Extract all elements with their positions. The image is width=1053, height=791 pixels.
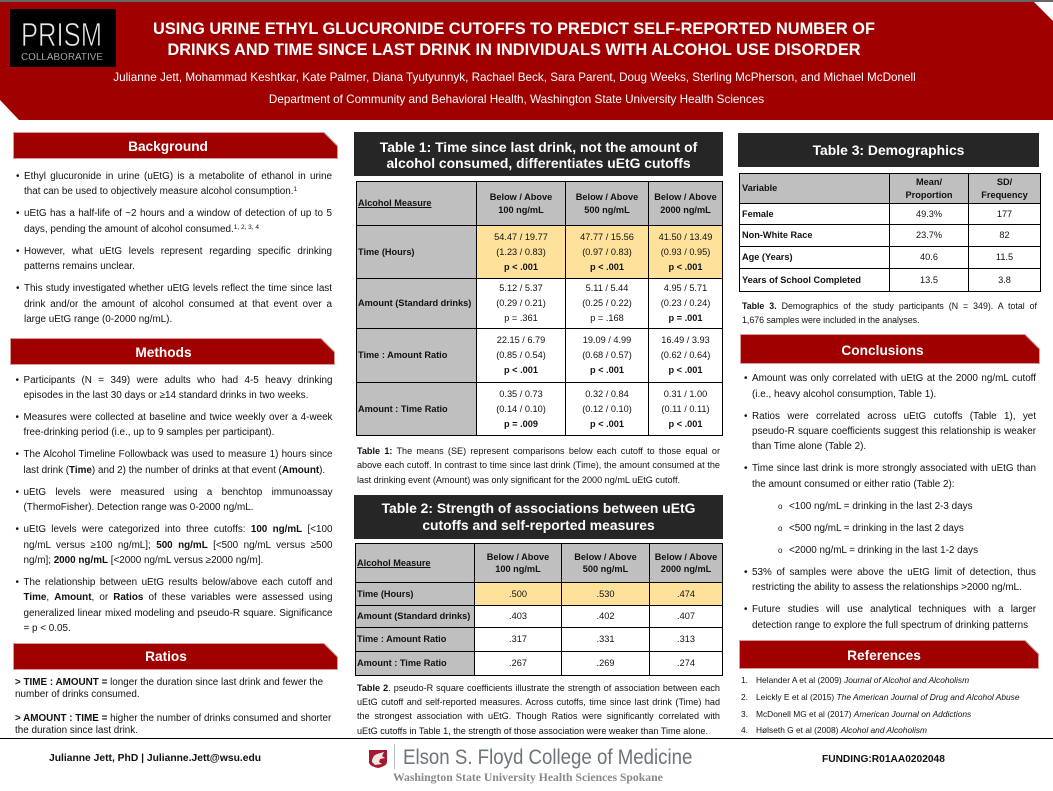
college name: Elson S. Floyd College of Medicine: [403, 745, 692, 769]
table 1 data: (0.25 / 0.22): [582, 298, 632, 308]
table 1 data: (0.68 / 0.57): [582, 350, 632, 360]
table 1 data: 2000 ng/mL: [660, 204, 711, 214]
heading: references: References: [847, 648, 921, 663]
table 1 data: Amount (Standard drinks): [358, 298, 471, 308]
caption: table 3: Table 3. Demographics of the study participants (N = 349). A total of: [742, 301, 1037, 311]
text block: background bullets: uEtG has a half-life of ~2 hours and a window of detection of up to 5: [24, 208, 332, 219]
contact: Julianne Jett, PhD | Julianne.Jett@wsu.edu: [49, 753, 261, 764]
caption: table 2: uEtG cutoffs in Table 1, the strength of those association were weaker than Time alone.: [357, 726, 708, 736]
table 2 data: .274: [677, 658, 695, 668]
table 2 data: .500: [509, 588, 527, 598]
panel: methods: •: [16, 412, 19, 423]
text block: background bullets: patterns remains unclear.: [24, 261, 135, 272]
table 2 data: Below / Above: [574, 552, 637, 562]
table 2 data: .474: [677, 588, 695, 598]
table 2 data: .407: [677, 611, 695, 621]
header banner: [0, 0, 1053, 120]
table 1 data: p = .009: [504, 418, 538, 428]
text block: reference list: [741, 675, 1020, 735]
title: DRINKS AND TIME SINCE LAST DRINK IN INDIVIDUALS WITH ALCOHOL USE DISORDER: [167, 40, 861, 58]
table 1 data: Alcohol Measure: [358, 198, 432, 208]
text block: conclusions bullets: Future studies will use analytical techniques with a larger: [752, 604, 1036, 615]
table 2 data: Below / Above: [655, 552, 717, 562]
text block: conclusions bullets: Time since last drink is more strongly associated with uEtG than: [752, 463, 1036, 474]
table 1 data: 0.31 / 1.00: [664, 388, 707, 398]
table 3 data: 11.5: [996, 252, 1013, 262]
table 2 data: .267: [509, 658, 527, 668]
table 1 data: (0.62 / 0.64): [661, 350, 710, 360]
text block: background bullets: drink and/or the amount of alcohol consumed at that event over a: [24, 299, 332, 310]
caption: table 2: the strongest association with uEtG. Though Ratios were significantly correlated with: [357, 711, 720, 721]
text block: ratio definitions: > AMOUNT : TIME = higher the number of drinks consumed and shorter: [15, 713, 331, 724]
heading: background: [13, 132, 338, 159]
table 3 data: 49.3%: [916, 208, 942, 218]
table 1 data: 5.11 / 5.44: [586, 283, 628, 293]
panel: background: •: [16, 283, 19, 294]
heading: ratios: Ratios: [145, 649, 187, 664]
text block: methods bullets: free-drinking period (i.e., up to 9 samples per participant).: [24, 427, 274, 438]
table 1 data: p < .001: [504, 365, 538, 375]
caption: table 2: Table 2. pseudo-R square coefficients illustrate the strength of association between each: [357, 683, 720, 693]
table 2 data: 2000 ng/mL: [661, 564, 711, 574]
title: [153, 20, 875, 58]
heading: table 3: [738, 133, 1039, 167]
text block: methods bullets: uEtG levels were categorized into three cutoffs: 100 ng/mL [<100: [24, 524, 332, 535]
caption: table 3: 1,676 samples were included in the analyses.: [742, 315, 920, 325]
table 2 data: [355, 543, 723, 676]
text block: conclusions bullets: o: [778, 524, 782, 533]
text block: reference list: 3.: [741, 709, 748, 719]
table 3 data: Variable: [742, 183, 777, 193]
campus name: Washington State University Health Sciences Spokane: [393, 771, 663, 784]
table 2 data: Time : Amount Ratio: [357, 634, 446, 644]
table 3 data: Female: [742, 208, 774, 218]
text block: background bullets: days, pending the amount of alcohol consumed.1, 2, 3, 4: [24, 224, 259, 235]
table 1 data: (0.97 / 0.83): [582, 246, 632, 256]
text block: reference list: Leickly E et al (2015) The American Journal of Drug and Alcohol Abuse: [756, 692, 1020, 702]
heading: background: Background: [128, 139, 208, 154]
table 2 data: Amount (Standard drinks): [357, 611, 470, 621]
heading: conclusions: Conclusions: [841, 343, 924, 358]
text block: methods bullets: The Alcohol Timeline Followback was used to measure 1) hours since: [24, 449, 332, 460]
table 2 data: .403: [509, 611, 527, 621]
text block: ratio definitions: [15, 677, 332, 736]
text block: conclusions bullets: detection range to explore the full spectrum of drinking patterns: [752, 620, 1028, 631]
panel: methods: •: [16, 449, 19, 460]
funding: FUNDING:R01AA0202048: [822, 754, 945, 765]
text block: conclusions bullets: o: [778, 546, 782, 555]
text block: conclusions bullets: [744, 373, 1036, 631]
panel: methods: •: [16, 375, 19, 386]
text block: methods bullets: Time, Amount, or Ratios of these variables were assessed using: [24, 592, 332, 603]
text block: ratio definitions: number of drinks consumed.: [15, 689, 140, 700]
table 1 data: (0.29 / 0.21): [496, 298, 546, 308]
table 1 data: Time : Amount Ratio: [358, 350, 447, 360]
table 1 data: 0.35 / 0.73: [499, 388, 543, 398]
table 3 data: Mean/: [916, 177, 942, 187]
table 1 data: (0.11 / 0.11): [661, 404, 710, 414]
panel: conclusions: •: [744, 604, 747, 615]
table 1 data: 16.49 / 3.93: [661, 335, 710, 345]
table 1 data: Amount : Time Ratio: [358, 404, 448, 414]
table 3 data: Years of School Completed: [742, 274, 861, 284]
text block: reference list: 4.: [741, 725, 748, 735]
table 2 data: .317: [509, 634, 527, 644]
text block: methods bullets: episodes in the last 30 days or ≥14 standard drinks in two weeks.: [24, 390, 308, 401]
table 2 data: Alcohol Measure: [357, 558, 431, 568]
heading: table 2: cutoffs and self-reported measures: [422, 517, 655, 533]
heading: table 1: [354, 132, 723, 176]
table 1 data: (0.12 / 0.10): [582, 404, 632, 414]
text block: methods bullets: = p < 0.05.: [24, 623, 71, 634]
icon: WSU crest: [369, 750, 387, 768]
text block: conclusions bullets: o: [778, 502, 782, 511]
text block: methods bullets: last drink (Time) and 2) the number of drinks at that event (Amount).: [24, 465, 325, 476]
table 2 data: 100 ng/mL: [495, 564, 541, 574]
text block: background bullets: However, what uEtG levels represent regarding specific drinking: [24, 246, 332, 257]
text block: conclusions bullets: (i.e., heavy alcohol consumption, Table 1).: [752, 389, 936, 400]
panel: background: •: [16, 208, 19, 219]
table 3 data: [739, 173, 1041, 292]
authors: Julianne Jett, Mohammad Keshtkar, Kate Palmer, Diana Tyutyunnyk, Rachael Beck, Sara Parent, Doug Weeks, Sterling McPherson, and Michael McDonell: [113, 71, 916, 84]
table 1 data: 0.32 / 0.84: [585, 388, 629, 398]
panel: conclusions: [740, 334, 1040, 631]
table 3 data: 13.5: [920, 274, 938, 284]
heading: methods: [10, 338, 335, 365]
text block: reference list: 1.: [741, 675, 748, 685]
caption: table 2: [357, 683, 720, 736]
table 1 data: (1.23 / 0.83): [496, 246, 546, 256]
table 1 data: 100 ng/mL: [498, 204, 544, 214]
table 1 data: p < .001: [669, 365, 702, 375]
table 3 data: Age (Years): [742, 252, 793, 262]
text block: methods bullets: Measures were collected at baseline and twice weekly over a 4-week: [24, 412, 332, 423]
table 1 data: (0.14 / 0.10): [496, 404, 546, 414]
panel: conclusions: •: [744, 411, 747, 422]
heading: table 3: Table 3: Demographics: [813, 142, 964, 158]
panel: methods: •: [16, 487, 19, 498]
table 1 data: 22.15 / 6.79: [497, 335, 545, 345]
panel: conclusions: •: [744, 567, 747, 578]
caption: table 1: above each cutoff. In contrast to time since last drink (Time), the amount consumed at the: [357, 460, 720, 470]
table 1 data: p = .168: [590, 313, 624, 323]
text block: reference list: Helander A et al (2009) Journal of Alcohol and Alcoholism: [756, 675, 969, 685]
table 3 data: Proportion: [906, 190, 952, 200]
text block: methods bullets: (ThermoFisher). Detection range was 0-2000 ng/mL.: [24, 502, 253, 513]
table 1 data: [356, 181, 723, 436]
table 3 data: Non-White Race: [742, 230, 812, 240]
table 2 data: .402: [597, 611, 614, 621]
text block: methods bullets: uEtG levels were measured using a benchtop immunoassay: [24, 487, 332, 498]
caption: table 1: last drinking event (Amount) was only significant for the 2000 ng/mL uEtG cutoff.: [357, 475, 680, 485]
table 1 data: Time (Hours): [358, 246, 414, 256]
table 1 data: (0.23 / 0.24): [661, 298, 710, 308]
panel: background: •: [16, 246, 19, 257]
text block: background bullets: large uEtG range (0-2000 ng/mL).: [24, 314, 172, 325]
text block: conclusions bullets: Ratios were correlated across uEtG cutoffs (Table 1), yet: [752, 411, 1036, 422]
table 1 data: p = .001: [669, 313, 702, 323]
text block: conclusions bullets: <100 ng/mL = drinking in the last 2-3 days: [789, 501, 973, 512]
table 1 data: 47.77 / 15.56: [580, 232, 634, 242]
text block: methods bullets: Participants (N = 349) were adults who had 4-5 heavy drinking: [24, 375, 332, 386]
heading: ratios: [13, 643, 338, 670]
text block: conclusions bullets: Amount was only correlated with uEtG at the 2000 ng/mL cutoff: [752, 373, 1036, 384]
heading: conclusions: [740, 334, 1040, 364]
table 3 data: 23.7%: [916, 230, 942, 240]
logo: PRISM Collaborative: COLLABORATIVE: [21, 52, 103, 63]
text block: ratio definitions: > TIME : AMOUNT = longer the duration since last drink and fewer the: [15, 677, 323, 688]
table 2 data: .313: [677, 634, 695, 644]
table 1 data: p < .001: [590, 365, 624, 375]
text block: conclusions bullets: than Time alone (Table 2).: [752, 441, 866, 452]
affiliation: Department of Community and Behavioral Health, Washington State University Health Sciences: [269, 93, 764, 106]
text block: methods bullets: ng/mL versus ≥100 ng/mL]; 500 ng/mL [<500 ng/mL versus ≥500: [24, 540, 332, 551]
text block: background bullets: [16, 171, 332, 325]
table 1 data: p = .361: [504, 313, 538, 323]
text block: background bullets: This study investigated whether uEtG levels reflect the time since last: [24, 283, 332, 294]
caption: table 3: [742, 301, 1037, 325]
text block: reference list: Hølseth G et al (2008) Alcohol and Alcoholism: [756, 725, 927, 735]
text block: conclusions bullets: pseudo-R square coefficients suggest this relationship is weaker: [752, 426, 1036, 437]
panel: table 3: [738, 133, 1041, 325]
caption: table 1: Table 1: The means (SE) represent comparisons below each cutoff to those equal or: [357, 446, 720, 456]
table 1 data: Below / Above: [654, 192, 717, 202]
table 3 data: 3.8: [998, 274, 1011, 284]
panel: table 2: [354, 495, 723, 736]
text block: methods bullets: generalized linear mixed modeling and pseudo-R square. Significance: [24, 608, 332, 619]
caption: table 2: uEtG cutoff and self-reported measures. Across cutoffs, time since last drink (Time) had: [357, 697, 720, 707]
table 2 data: .530: [597, 588, 614, 598]
caption: table 1: [357, 446, 720, 485]
table 1 data: 19.09 / 4.99: [583, 335, 631, 345]
table 1 data: 5.12 / 5.37: [499, 283, 543, 293]
text block: background bullets: that can be used to objectively measure alcohol consumption.1: [24, 186, 297, 197]
table 1 data: 500 ng/mL: [584, 204, 630, 214]
panel: references: [739, 640, 1039, 735]
heading: table 2: [354, 495, 723, 539]
table 1 data: 54.47 / 19.77: [494, 232, 548, 242]
panel: methods: •: [16, 524, 19, 535]
panel: conclusions: •: [744, 373, 747, 384]
text block: methods bullets: [16, 375, 332, 634]
panel: background: •: [16, 171, 19, 182]
table 1 data: (0.85 / 0.54): [496, 350, 546, 360]
table 3 data: SD/: [997, 177, 1012, 187]
panel: conclusions: •: [744, 463, 747, 474]
text block: ratio definitions: the duration since last drink.: [15, 725, 138, 736]
divider: [394, 744, 395, 769]
table 1 data: 41.50 / 13.49: [659, 232, 712, 242]
table 1 data: p < .001: [669, 262, 702, 272]
table 1 data: Below / Above: [576, 192, 638, 202]
table 3 data: 177: [997, 208, 1012, 218]
panel: table 1: [354, 132, 723, 485]
text block: conclusions bullets: restricting the ability to assess the relationships >2000 ng/mL.: [752, 582, 1022, 593]
table 1 data: 4.95 / 5.71: [664, 283, 707, 293]
text block: reference list: McDonell MG et al (2017) American Journal on Addictions: [756, 709, 971, 719]
table 2 data: .331: [597, 634, 614, 644]
table 2 data: .269: [597, 658, 614, 668]
table 2 data: Amount : Time Ratio: [357, 658, 447, 668]
text block: conclusions bullets: 53% of samples were above the uEtG limit of detection, thus: [752, 567, 1036, 578]
table 1 data: p < .001: [669, 418, 702, 428]
logo: PRISM Collaborative: [10, 9, 116, 67]
heading: table 2: Table 2: Strength of associations between uEtG: [382, 500, 695, 516]
title: USING URINE ETHYL GLUCURONIDE CUTOFFS TO PREDICT SELF-REPORTED NUMBER OF: [153, 20, 875, 38]
table 1 data: p < .001: [590, 418, 624, 428]
panel: ratios: [13, 643, 338, 736]
panel: background: [13, 132, 338, 325]
panel: methods: •: [16, 577, 19, 588]
heading: references: [739, 640, 1039, 669]
heading: table 1: alcohol consumed, differentiates uEtG cutoffs: [386, 155, 691, 171]
text block: conclusions bullets: the amount consumed or either ratio (Table 2):: [752, 479, 955, 490]
table 1 data: p < .001: [504, 262, 538, 272]
table 2 data: 500 ng/mL: [583, 564, 628, 574]
table 3 data: 40.6: [920, 252, 938, 262]
table 3 data: 82: [999, 230, 1010, 240]
text block: methods bullets: ng/m]; 2000 ng/mL [<2000 ng/mL versus ≥2000 ng/m].: [24, 555, 263, 566]
table 1 data: p < .001: [590, 262, 624, 272]
footer: [0, 738, 1053, 791]
heading: table 1: Table 1: Time since last drink, not the amount of: [380, 139, 697, 155]
text block: conclusions bullets: <500 ng/mL = drinking in the last 2 days: [789, 523, 964, 534]
text block: conclusions bullets: <2000 ng/mL = drinking in the last 1-2 days: [789, 545, 978, 556]
heading: methods: Methods: [135, 345, 192, 360]
text block: background bullets: Ethyl glucuronide in urine (uEtG) is a metabolite of ethanol in urine: [24, 171, 332, 182]
table 3 data: Frequency: [981, 190, 1028, 200]
table 2 data: Time (Hours): [357, 588, 414, 598]
text block: methods bullets: The relationship between uEtG results below/above each cutoff and: [24, 577, 332, 588]
table 2 data: Below / Above: [487, 552, 549, 562]
text block: reference list: 2.: [741, 692, 748, 702]
panel: methods: [10, 338, 335, 634]
table 1 data: (0.93 / 0.95): [661, 246, 710, 256]
table 1 data: Below / Above: [490, 192, 552, 202]
